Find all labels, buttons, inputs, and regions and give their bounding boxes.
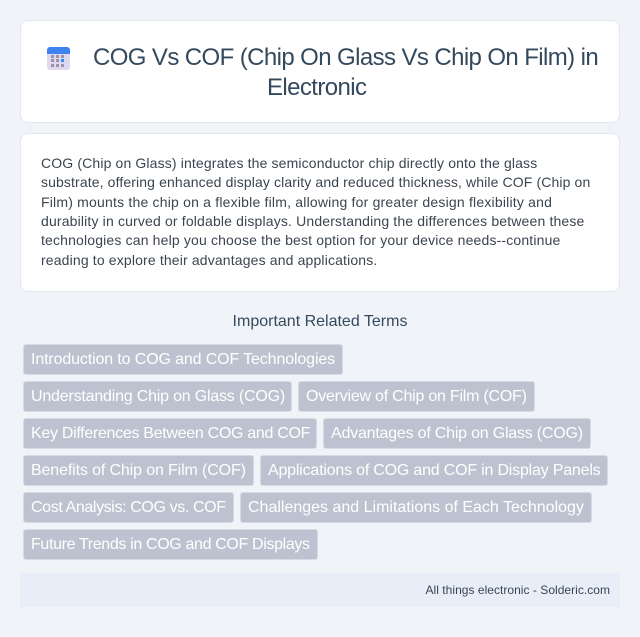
intro paragraph: substrate, offering enhanced display clarity and reduced thickness, while COF (Chip on <box>41 174 590 190</box>
tag <box>23 344 343 375</box>
tag <box>323 418 591 449</box>
title: Electronic <box>267 74 366 101</box>
title <box>93 44 598 101</box>
tag: Understanding Chip on Glass (COG) <box>31 388 285 405</box>
intro paragraph: reading to explore their advantages and applications. <box>41 252 377 268</box>
tag <box>23 455 254 486</box>
intro paragraph: Film) mounts the chip on a flexible film, allowing for greater design flexibility and <box>41 194 552 210</box>
tag: Key Differences Between COG and COF <box>31 425 310 442</box>
footer credit: All things electronic - Solderic.com <box>426 583 610 597</box>
tag: Overview of Chip on Film (COF) <box>306 388 527 405</box>
related terms heading: Important Related Terms <box>233 313 407 330</box>
tag: Cost Analysis: COG vs. COF <box>31 499 226 516</box>
related terms tags <box>23 344 608 560</box>
intro paragraph: technologies can help you choose the best option for your device needs--continue <box>41 232 560 248</box>
icon: calendar <box>47 47 70 70</box>
footer bar <box>20 573 620 607</box>
intro text panel <box>20 133 620 292</box>
intro paragraph <box>41 155 590 268</box>
tag <box>298 381 535 412</box>
intro paragraph: durability in curved or foldable displays. Understanding the differences between these <box>41 213 584 229</box>
tag <box>23 381 292 412</box>
tag <box>240 492 592 523</box>
tag <box>260 455 608 486</box>
tag: Introduction to COG and COF Technologies <box>31 351 335 368</box>
intro paragraph: COG (Chip on Glass) integrates the semiconductor chip directly onto the glass <box>41 155 537 171</box>
header panel <box>20 20 620 123</box>
tag: Advantages of Chip on Glass (COG) <box>331 425 583 442</box>
tag <box>23 529 318 560</box>
tag: Challenges and Limitations of Each Technology <box>248 499 584 516</box>
tag <box>23 492 234 523</box>
tag: Future Trends in COG and COF Displays <box>31 536 310 553</box>
tag <box>23 418 317 449</box>
title: COG Vs COF (Chip On Glass Vs Chip On Film) in <box>93 44 598 71</box>
tag: Applications of COG and COF in Display Panels <box>268 462 600 479</box>
tag: Benefits of Chip on Film (COF) <box>31 462 246 479</box>
